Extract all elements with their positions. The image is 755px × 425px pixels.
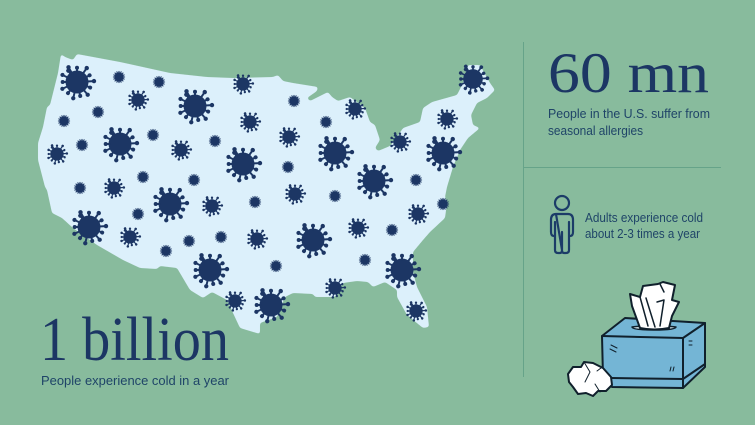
map: United States: [38, 54, 495, 334]
box slot: [632, 326, 676, 330]
caption: seasonal allergies: People in the U.S. suffer from: [548, 107, 710, 121]
caption: adults experience cold: Adults experience cold: [585, 211, 703, 225]
caption: adults experience cold: about 2-3 times a year: [585, 227, 700, 241]
viruses: medium: [47, 64, 489, 322]
box body: [602, 318, 705, 388]
stat: 1 billion: 1 billion: [40, 306, 229, 374]
icon: tissue box: [568, 282, 705, 396]
viruses: small: [58, 71, 449, 272]
crumpled tissue: [568, 362, 612, 396]
tissues: [630, 282, 679, 330]
divider lines: [524, 42, 721, 377]
caption: people experience cold: People experience cold in a year: [41, 374, 229, 388]
caption: seasonal allergies: seasonal allergies: [548, 124, 643, 138]
viruses: large: [60, 64, 462, 324]
icon: person: [551, 196, 573, 253]
stat: 60 mn: 60 mn: [548, 42, 709, 105]
